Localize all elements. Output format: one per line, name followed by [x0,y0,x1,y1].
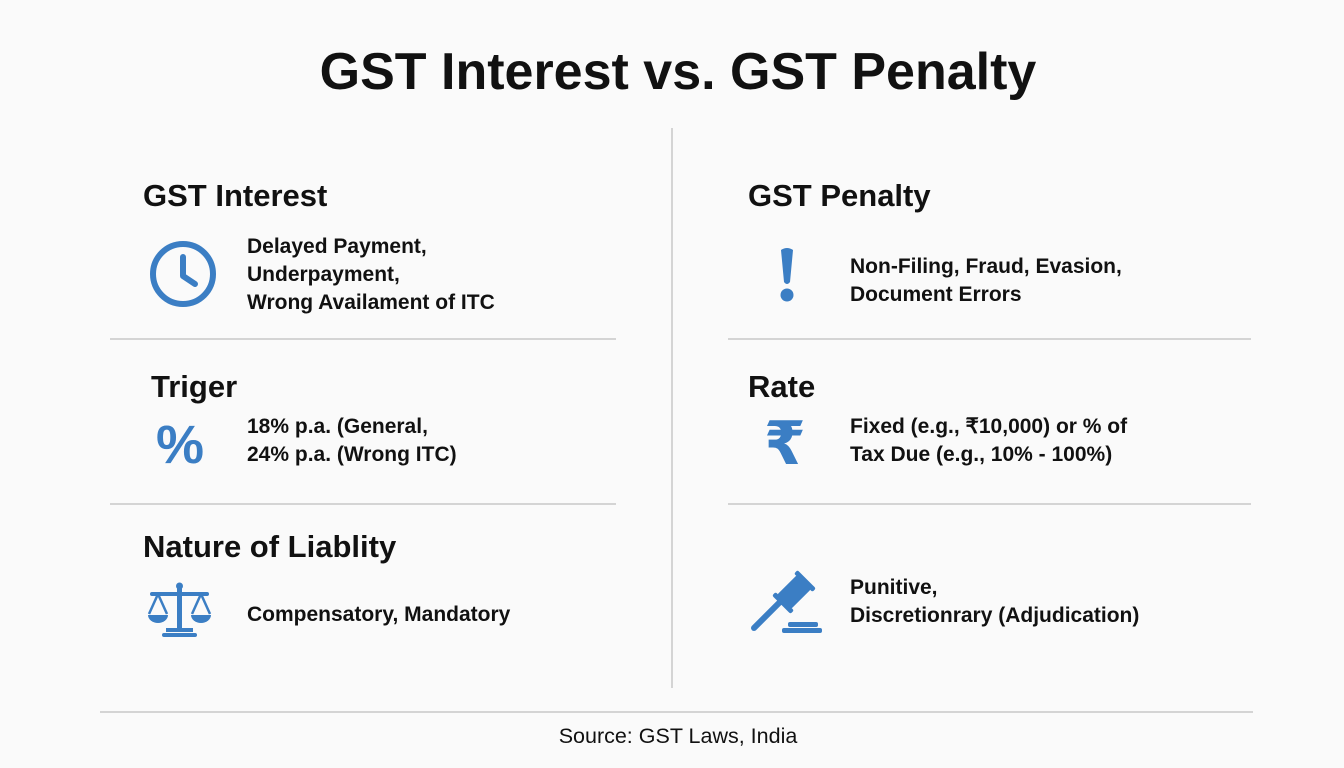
icon: scales [148,582,212,637]
text: interest causes [247,235,495,314]
text: interest causes: Delayed Payment, [247,235,427,258]
text: penalty rate: Fixed (e.g., ₹10,000) or % of [850,415,1127,438]
panel: Triger [151,369,457,475]
text: interest causes: Underpayment, [247,263,400,286]
heading: GST Penalty: GST Penalty [748,178,931,213]
icon: clock [150,241,216,307]
text: penalty nature: Punitive, [850,576,938,599]
text: penalty causes [850,255,1122,306]
text: rates: 18% p.a. (General, [247,415,428,438]
icon: percent: % [156,415,204,475]
heading: Rate: Rate [748,369,815,404]
panel: Rate [748,369,1128,479]
text: penalty causes: Non-Filing, Fraud, Evasion, [850,255,1122,278]
text: penalty causes: Document Errors [850,283,1022,306]
text: liability nature: Compensatory, Mandatory [247,603,510,626]
icon: gavel [751,570,822,633]
panel: Nature of Liablity [143,529,510,637]
panel: GST Interest [143,178,495,314]
icon: exclamation [780,248,794,302]
icon: rupee: ₹ [764,409,806,479]
source footer: Source: GST Laws, India [559,724,797,748]
panel: GST Penalty [748,178,1122,306]
heading: Triger: Triger [151,369,237,404]
text: interest causes: Wrong Availament of ITC [247,291,495,314]
text: penalty nature [850,576,1139,627]
heading: GST Interest: GST Interest [143,178,327,213]
title: GST Interest vs. GST Penalty [320,43,1036,101]
text: rates: 24% p.a. (Wrong ITC) [247,443,457,466]
text: penalty nature: Discretionrary (Adjudication) [850,604,1139,627]
panel: Nature of penalty [751,570,1139,633]
text: penalty rate: Tax Due (e.g., 10% - 100%) [850,443,1112,466]
text: rates [247,415,457,466]
heading: Nature of Liablity: Nature of Liablity [143,529,396,564]
text: penalty rate [850,415,1128,466]
